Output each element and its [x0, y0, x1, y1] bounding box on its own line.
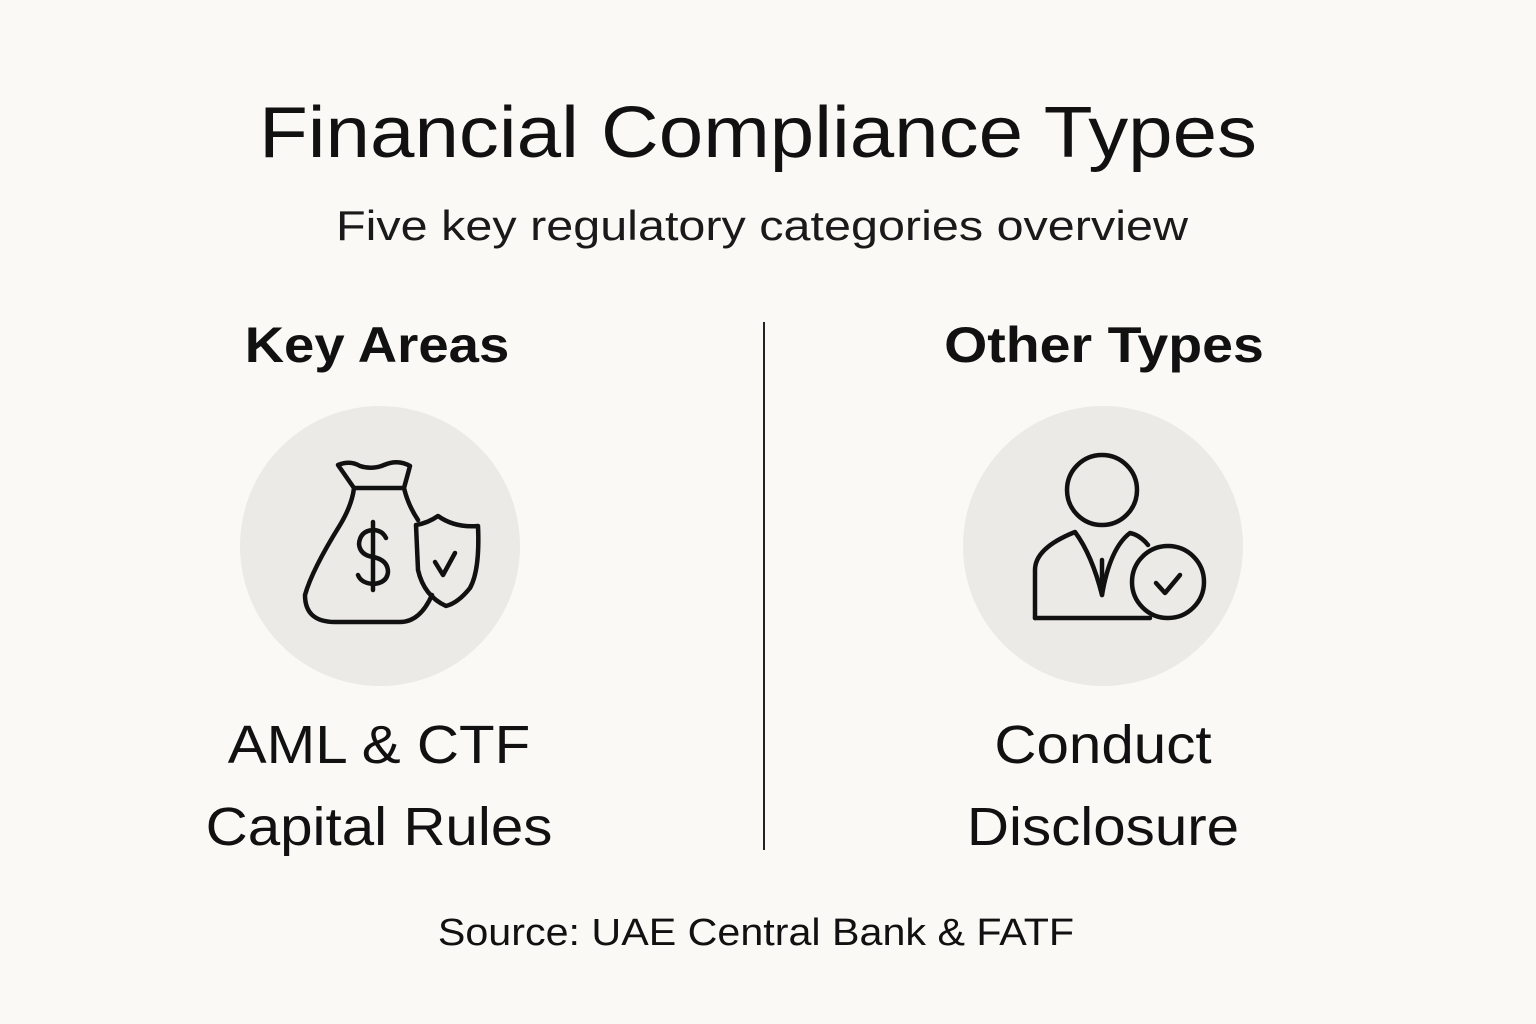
text: key areas items — [206, 715, 552, 857]
text: other types items: Disclosure — [967, 797, 1239, 857]
heading: other types: Other Types — [944, 317, 1264, 373]
text: other types items — [967, 715, 1239, 857]
title: Financial Compliance Types — [259, 93, 1257, 173]
source note: Source: UAE Central Bank & FATF — [438, 912, 1074, 954]
divider — [763, 322, 765, 850]
text: key areas items: AML & CTF — [228, 715, 530, 775]
text: key areas items: Capital Rules — [206, 797, 552, 857]
heading: key areas: Key Areas — [245, 317, 509, 373]
subtitle: Five key regulatory categories overview — [336, 202, 1188, 249]
text: other types items: Conduct — [994, 715, 1212, 775]
